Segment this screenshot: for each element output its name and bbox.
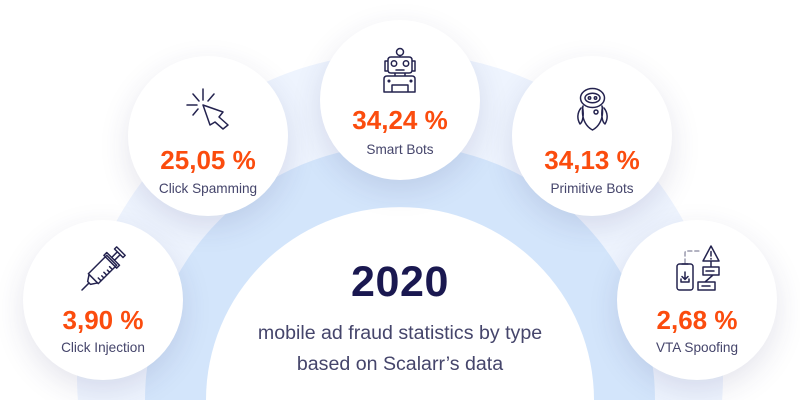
central white circle	[206, 207, 594, 400]
subtitle: based on Scalarr’s data	[297, 352, 503, 374]
panel: smart bots	[320, 20, 480, 180]
icon: syringe	[81, 246, 126, 291]
icon: robot	[383, 48, 416, 93]
year heading: 2020	[351, 258, 449, 306]
icon: cursor	[186, 88, 229, 130]
value: 3,90 %	[63, 305, 143, 335]
middle blue ring	[145, 145, 655, 400]
subtitle: mobile ad fraud statistics by type	[258, 322, 542, 344]
label: VTA Spoofing	[656, 340, 738, 355]
value: 2,68 %	[657, 305, 737, 335]
panel: primitive bots	[512, 56, 672, 216]
label: Smart Bots	[366, 142, 434, 157]
value: 34,24 %	[352, 105, 448, 135]
label: Primitive Bots	[550, 181, 634, 196]
label: Click Spamming	[159, 181, 257, 196]
panel: click injection	[23, 220, 183, 380]
panel: click spamming	[128, 56, 288, 216]
panel: VTA spoofing	[617, 220, 777, 380]
icon: round robot	[577, 88, 608, 131]
outer light ring	[77, 53, 723, 400]
value: 34,13 %	[544, 145, 640, 175]
value: 25,05 %	[160, 145, 256, 175]
subtitle	[258, 322, 542, 374]
icon: phone and warning flow	[676, 245, 720, 291]
label: Click Injection	[61, 340, 145, 355]
